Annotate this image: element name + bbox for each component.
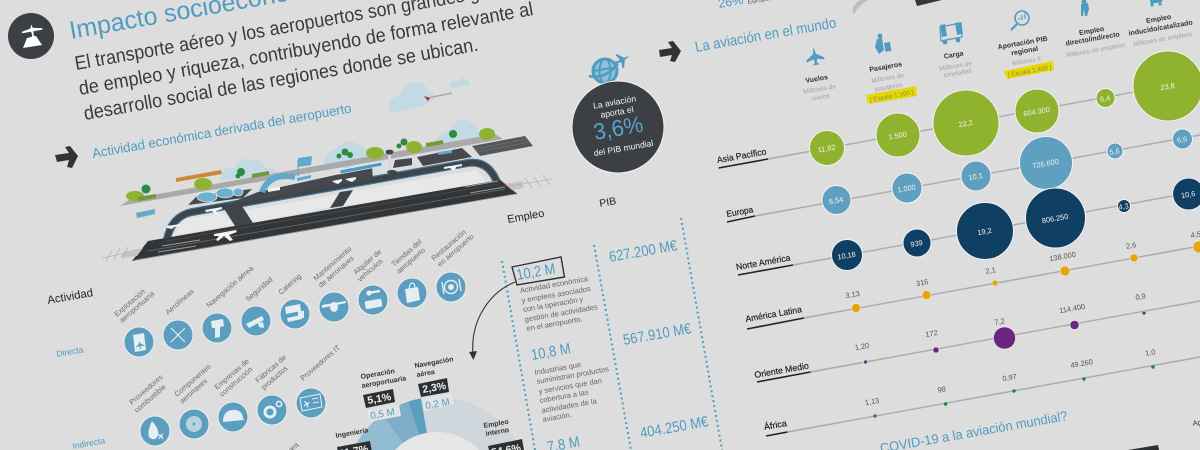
column: empleo directo/indirecto: directo/indirecto [1065, 31, 1120, 48]
label: navegación aérea [414, 356, 454, 412]
column: empleo directo/indirecto: Millones de empleos [1066, 42, 1126, 59]
description: en el aeropuerto. [526, 314, 583, 333]
labels row: actividad directa: Explotación [112, 287, 147, 319]
column: empleo directo/indirecto [1065, 0, 1126, 59]
icon: explotación aeroportuaria [124, 327, 154, 357]
column: aportación PIB regional: Millones € [1012, 55, 1042, 68]
icon: runway and plane badge [8, 13, 54, 59]
column headers [803, 0, 1193, 104]
row: Oriente Medio: Oriente Medio [754, 361, 810, 380]
column: vuelos [803, 46, 837, 103]
icon: tiendas duty free [397, 278, 427, 308]
label: navegación aérea: 0,2 M [425, 397, 451, 412]
employment block: 10,2 M [512, 257, 599, 333]
column: aportación PIB regional: regional [1011, 46, 1039, 57]
description: y empleos asociados [521, 284, 592, 305]
column: carga [939, 22, 973, 79]
column: pasajeros [866, 34, 917, 104]
row: Norte América: 10,6 [1180, 189, 1196, 200]
row: África: 98 [937, 384, 946, 395]
icons row: actividad directa [124, 272, 466, 357]
row: Oriente Medio: 0,9 [1135, 291, 1146, 302]
labels row: actividad indirecta: combustible [132, 382, 168, 415]
value box: 10,2 M [515, 260, 557, 284]
row: Asia Pacífico: 604.300 [1023, 105, 1051, 118]
parked aircraft [167, 164, 462, 241]
row: Asia Pacífico: 22,2 [958, 118, 973, 129]
labels row: actividad indirecta: Fábricas de [253, 353, 288, 385]
column: pasajeros: pasajeros [874, 81, 904, 93]
description: Industrias que [534, 360, 582, 377]
labels row: actividad directa: Navegación aérea [204, 263, 256, 310]
dotted column dividers [502, 218, 722, 450]
row: América Latina: 2,6 [1125, 240, 1137, 251]
labels row: actividad indirecta: Componentes [172, 362, 213, 399]
small blue pad [136, 209, 155, 218]
label: ingeniería: Ingeniería [335, 427, 369, 440]
row: Europa: 1.000 [897, 183, 916, 195]
labels row: actividad directa: Seguridad [243, 275, 274, 304]
arrow: aviación en el mundo [659, 41, 681, 62]
main apron [223, 167, 373, 206]
row: Europa [726, 129, 1200, 222]
icon: alquiler de vehículos [358, 285, 388, 315]
description: con la operación y [522, 294, 584, 314]
label: empleo interno: interno [485, 427, 510, 438]
row: Norte América [735, 178, 1200, 275]
row: Asia Pacífico: 6,4 [1099, 93, 1111, 104]
column heading: empleo: Empleo [506, 208, 545, 226]
taxiway [167, 163, 497, 239]
labels row: actividad directa: de aeronaves [316, 253, 356, 290]
column: vuelos: Vuelos [805, 74, 829, 85]
top cropped fragments [717, 0, 942, 14]
icon: proveedores IT [296, 388, 326, 418]
row: Norte América: 939 [910, 238, 923, 249]
PIB values: 404.250 M€ [639, 413, 710, 442]
description: y servicios que dan [538, 376, 603, 396]
row: Asia Pacífico: Asia Pacífico [716, 146, 767, 165]
employment block: 10,8 M [530, 340, 610, 424]
row: América Latina: 316 [915, 277, 929, 288]
row: África: 1,0 [1144, 347, 1156, 358]
column: empleo inducido/catalizado [1128, 0, 1193, 48]
activity table: row heading: Actividad [46, 287, 94, 307]
label: ingeniería [335, 427, 372, 450]
labels row: actividad directa: aeropuerto [394, 246, 427, 276]
callout: 3,6% PIB mundial: 3,6% [591, 111, 645, 145]
callout: 3,6% PIB mundial: La aviación [592, 93, 637, 111]
column: vuelos: Millones de [803, 83, 837, 96]
row: Asia Pacífico: 23,8 [1160, 81, 1175, 92]
runway [132, 180, 517, 261]
labels row: actividad directa: Mantenimiento [311, 244, 353, 283]
label: empleo interno [483, 419, 524, 450]
labels row: actividad directa: aeroportuaria [117, 289, 157, 325]
arrow: economic activity [55, 146, 78, 168]
bottom dark box fragment [1128, 445, 1159, 450]
column: vuelos: vuelos [811, 92, 831, 103]
labels row: actividad directa: Alquiler de [351, 247, 383, 277]
heading: aviación en el mundo: La aviación en el mundo [694, 15, 838, 56]
clouds [220, 78, 490, 180]
labels row: actividad indirecta: Proveedores IT [298, 343, 342, 383]
heading: actividad económica: Actividad económica derivada del aeropuerto [91, 101, 353, 161]
control tower [386, 150, 397, 174]
row: Europa: 10,1 [968, 171, 983, 182]
PIB values: 567.910 M€ [622, 320, 693, 349]
row: América Latina [745, 229, 1200, 329]
description [519, 274, 599, 333]
row: Oriente Medio: 1,20 [854, 341, 870, 352]
label: operación aeroportuaria: 5,1% [366, 391, 393, 407]
donut labels [335, 356, 524, 450]
dark box fragment [915, 0, 942, 6]
PIB values: 627.200 M€ [608, 237, 679, 266]
row: América Latina: 138.000 [1049, 250, 1077, 263]
plane in the sky [424, 93, 452, 101]
parking areas [393, 136, 533, 168]
icon: combustible [140, 416, 170, 446]
row: Norte América: 10,18 [837, 250, 856, 262]
row: África [763, 347, 1200, 436]
label: operación aeroportuaria: Operación [360, 368, 395, 381]
icon: aerolíneas [163, 320, 193, 350]
buses [138, 140, 443, 201]
row: África: 49.260 [1070, 357, 1093, 370]
row: Oriente Medio [754, 291, 1200, 382]
icon: mantenimiento [319, 292, 349, 322]
labels row: actividad directa: vehículos [355, 256, 385, 284]
label: navegación aérea: Navegación [414, 356, 454, 370]
description: suministran productos [536, 364, 610, 386]
labels row: actividad directa: Tiendas del [389, 237, 424, 269]
row: África: 1,13 [864, 396, 880, 407]
inner fields [172, 170, 487, 236]
cross taxiways [223, 190, 353, 226]
description: cobertura a las [539, 387, 589, 405]
labels row: actividad directa: Aerolíneas [163, 287, 196, 317]
label: directa: Directa [56, 344, 84, 359]
hangar apron with domes [188, 188, 252, 205]
icons row: actividad indirecta [140, 388, 326, 446]
row: Oriente Medio: 172 [925, 328, 938, 339]
column: pasajeros: [ Escala 1:100 ] [869, 89, 914, 104]
column: aportación PIB regional: [ Escala 1:400 ] [1007, 64, 1052, 79]
label: operación aeroportuaria [360, 368, 407, 422]
terminal arch [262, 156, 312, 192]
labels row: actividad directa: Restauración [429, 228, 468, 263]
column: empleo directo/indirecto: Empleo [1079, 26, 1105, 37]
row: Asia Pacífico: 1.500 [888, 130, 907, 142]
row: Europa: Europa [726, 204, 754, 219]
icon: catering [280, 299, 310, 329]
label: empleo interno: Empleo [483, 419, 509, 430]
row: Oriente Medio: 114.400 [1058, 302, 1086, 315]
callout: 3,6% PIB mundial: del PIB mundial [593, 138, 654, 158]
row: América Latina: 3,13 [845, 289, 860, 300]
icon: navegación aérea [202, 313, 232, 343]
description: gestión de actividades [524, 302, 599, 324]
value: 10,8 M [530, 340, 572, 364]
column: pasajeros: Pasajeros [869, 61, 903, 74]
labels row: actividad indirecta: Empresas de [212, 357, 251, 392]
airport illustration [102, 78, 552, 261]
approach lights [102, 175, 552, 261]
description: actividades de la [541, 396, 598, 415]
column: empleo inducido/catalizado: Millones de empleos [1133, 31, 1193, 48]
column: pasajeros: Millones de [871, 72, 905, 85]
description [534, 360, 610, 424]
row: Europa: 8,54 [828, 195, 844, 206]
row: América Latina: América Latina [745, 304, 803, 324]
donut chart: direct employment [353, 397, 521, 450]
train [176, 170, 222, 182]
column heading: PIB: PIB [598, 195, 617, 210]
panel: impacto socioeconómico [8, 0, 569, 168]
labels row: actividad directa [112, 228, 476, 325]
icon: construcción [218, 402, 248, 432]
column: aportación PIB regional: Aportación PIB [997, 36, 1048, 51]
row: Oriente Medio: 7,2 [994, 316, 1005, 327]
PIB values [608, 237, 710, 442]
row: Norte América: Norte América [735, 253, 791, 272]
column: empleo inducido/catalizado: inducido/catalizado [1128, 19, 1193, 38]
labels row: actividad directa: Catering [276, 272, 303, 297]
description: aviación. [542, 410, 573, 424]
green trees and bushes [126, 128, 495, 201]
label: navegación aérea: aérea [416, 369, 435, 379]
column: carga: toneladas [943, 67, 973, 79]
callout: 3,6% PIB mundial [572, 49, 664, 173]
row: América Latina: 2,1 [985, 265, 996, 276]
label: operación aeroportuaria: 0,5 M [370, 407, 396, 422]
icon: restauración [436, 272, 466, 302]
terminal building [340, 162, 382, 174]
callout: 3,6% PIB mundial: aporta el [600, 104, 634, 120]
column: carga: Carga [943, 50, 964, 61]
row: África: África [763, 418, 788, 432]
column: empleo inducido/catalizado: Empleo [1146, 14, 1172, 25]
row: Asia Pacífico: 11,82 [817, 143, 836, 155]
labels row: actividad indirecta: construcción [217, 365, 254, 399]
label: navegación aérea: 2,3% [421, 380, 448, 396]
row: Europa: 726.600 [1032, 157, 1060, 170]
labels row: actividad indirecta: Proveedores [127, 372, 165, 407]
column: aportación PIB regional [997, 11, 1054, 79]
label: operación aeroportuaria: aeroportuaria [361, 375, 407, 390]
row: Europa: 6,6 [1176, 134, 1188, 145]
row: África: 0,97 [1002, 372, 1017, 383]
bubble chart rows [716, 51, 1200, 436]
arrow: curved to donut [469, 282, 515, 360]
map fragment [852, 0, 868, 14]
access road [120, 134, 503, 206]
icon: fábricas [257, 395, 287, 425]
labels row: actividad indirecta: productos [259, 363, 290, 392]
row: Norte América: 4,3 [1118, 201, 1129, 212]
icon: globe and plane [589, 49, 633, 83]
labels row: actividad indirecta: aeronaves [177, 376, 209, 406]
row: Norte América: 806.250 [1041, 212, 1069, 225]
description: Actividad económica [519, 274, 589, 295]
row: Asia Pacífico [716, 51, 1200, 168]
labels row: actividad directa: en aeropuerto [435, 232, 476, 269]
column: carga: Millones de [939, 60, 973, 73]
icon: seguridad [241, 306, 271, 336]
icon: componentes aeronaves [179, 409, 209, 439]
row: Europa: 5,6 [1109, 146, 1120, 157]
intro paragraph: desarrollo social de las regiones donde se ubican. [82, 34, 480, 125]
labels row: actividad indirecta [127, 343, 342, 450]
row: Norte América: 19,2 [977, 226, 992, 237]
